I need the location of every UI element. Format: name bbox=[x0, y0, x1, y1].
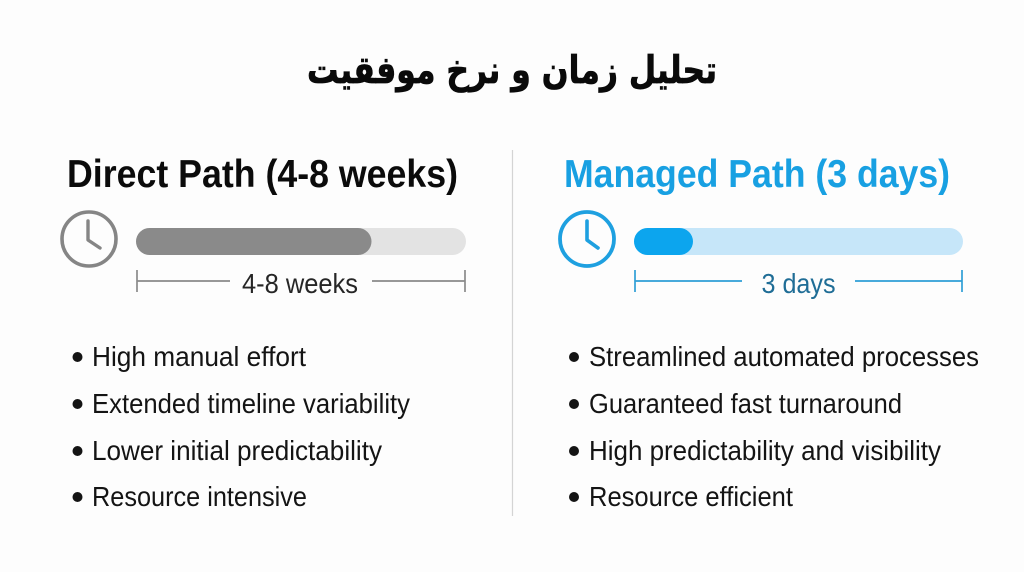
bullet list: managed path: Guaranteed fast turnaround bbox=[589, 388, 902, 419]
title: تحلیل زمان و نرخ موفقیت bbox=[307, 48, 717, 93]
bullet list: managed path: High predictability and visibility bbox=[589, 435, 941, 466]
duration bracket: 4-8 weeks bbox=[137, 268, 465, 299]
duration bracket: 3 days bbox=[635, 268, 962, 299]
bullet list: managed path: Resource efficient bbox=[589, 481, 793, 512]
progress bar: 4-8 weeks bbox=[136, 228, 466, 255]
bullet list: managed path: Streamlined automated processes bbox=[589, 341, 979, 372]
heading: direct path: Direct Path (4-8 weeks) bbox=[67, 153, 458, 196]
bullet list: managed path bbox=[569, 341, 979, 512]
icon: blue clock bbox=[560, 212, 614, 266]
progress bar: 3 days bbox=[634, 228, 963, 255]
heading: managed path: Managed Path (3 days) bbox=[564, 153, 950, 196]
bullet list: direct path: Resource intensive bbox=[92, 481, 307, 512]
duration bracket: 3 days: 3 days bbox=[762, 268, 836, 299]
panel: managed path bbox=[560, 153, 979, 512]
panel: direct path bbox=[62, 153, 466, 512]
bullet list: direct path bbox=[72, 341, 410, 512]
bullet list: direct path: Lower initial predictability bbox=[92, 435, 382, 466]
bullet list: direct path: Extended timeline variability bbox=[92, 388, 410, 419]
bullet list: direct path: High manual effort bbox=[92, 341, 306, 372]
duration bracket: 4-8 weeks: 4-8 weeks bbox=[242, 268, 358, 299]
icon: grey clock bbox=[62, 212, 116, 266]
